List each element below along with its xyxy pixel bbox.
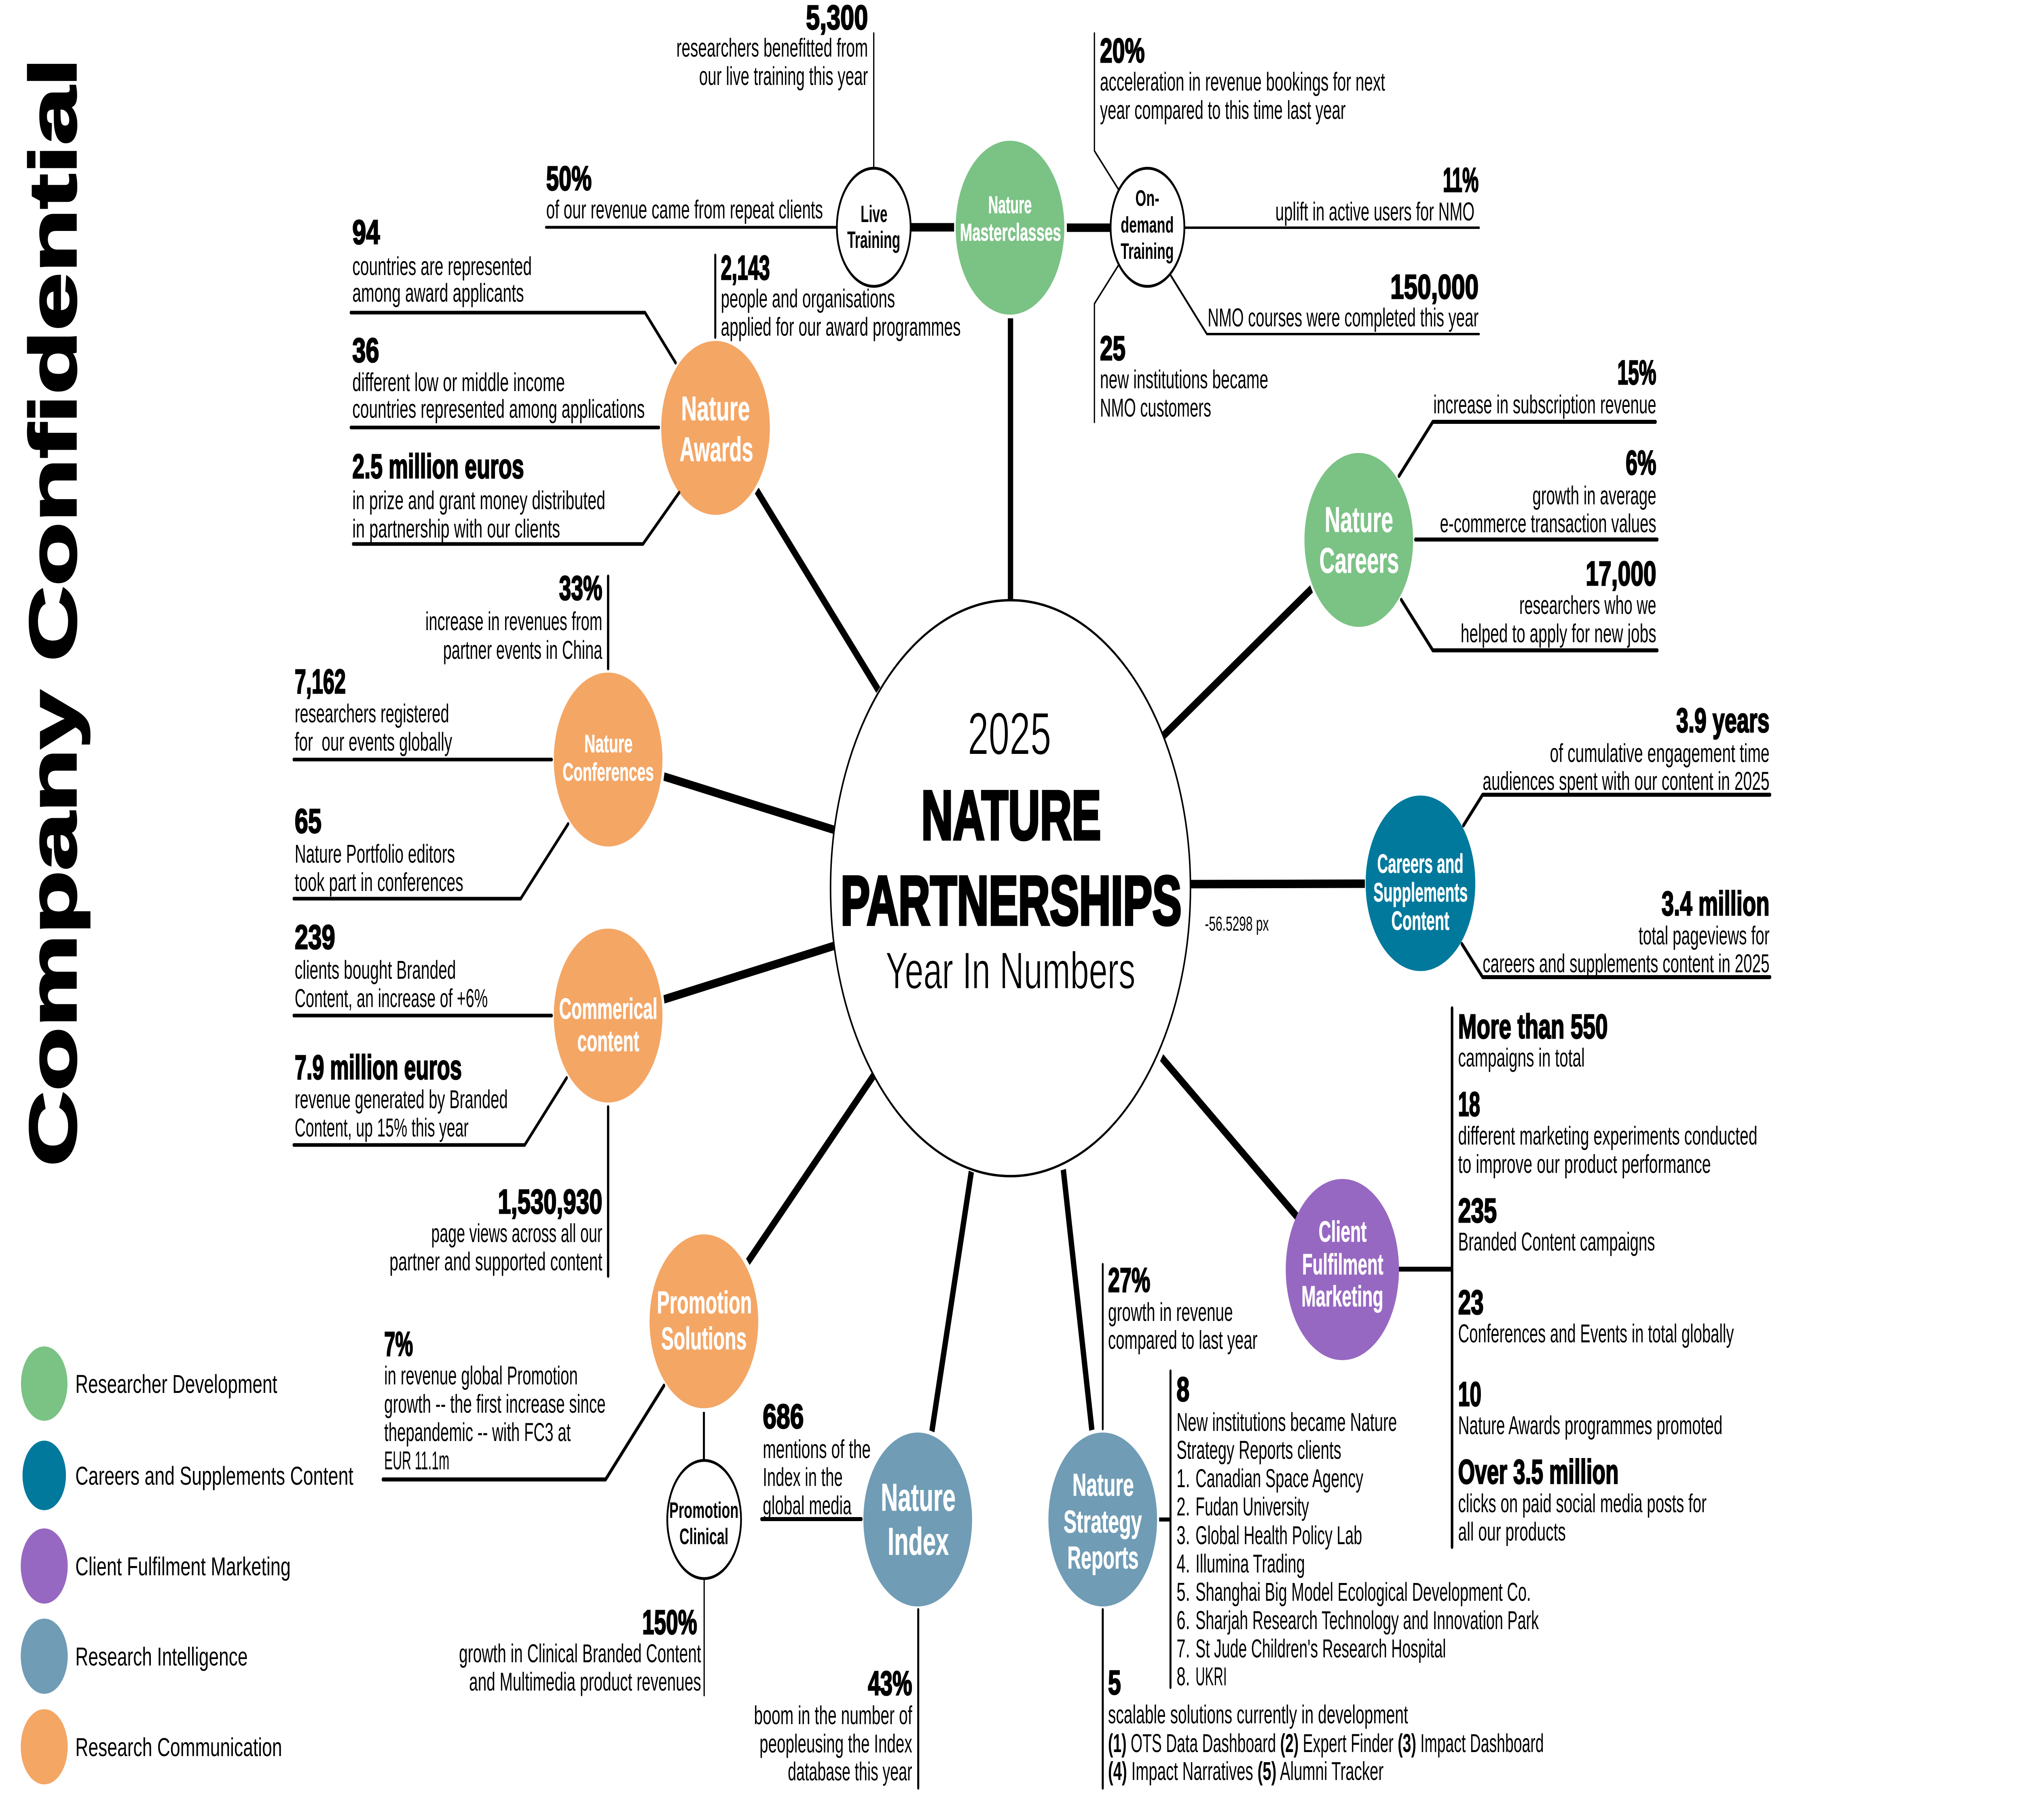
stat: 20%: acceleration in revenue bookings for next — [1100, 68, 1385, 96]
stat: over 3.5 million — [1458, 1453, 1707, 1546]
panel: promotion solutions — [383, 1234, 758, 1696]
stat: 8 new institutions list: 4. — [1176, 1550, 1190, 1578]
live training circle: Training — [847, 227, 900, 253]
stat: 8 new institutions list: 8. — [1176, 1663, 1190, 1691]
on-demand training circle: Training — [1121, 239, 1174, 264]
stat: 17,000 — [1401, 554, 1657, 650]
stat: 3.4 million: 3.4 million — [1662, 885, 1770, 923]
stat: 43%: peopleusing the Index — [759, 1730, 912, 1758]
stat: 6%: e-commerce transaction values — [1440, 510, 1656, 538]
stat: 36 — [351, 331, 659, 427]
stat: 7,162 — [294, 662, 552, 760]
stat: 2.5 million euros: 2.5 million euros — [352, 447, 524, 485]
promotion clinical circle — [667, 1460, 741, 1579]
client fulfilment circle — [1286, 1179, 1399, 1360]
stat: over 3.5 million: clicks on paid social media posts for — [1458, 1490, 1707, 1518]
panel: nature index — [754, 1397, 972, 1788]
stat: 8 new institutions list: Sharjah Research Technology and Innovation Park — [1195, 1606, 1539, 1635]
client fulfilment circle: Marketing — [1301, 1280, 1383, 1313]
stat: 8 new institutions list: 5. — [1176, 1578, 1190, 1606]
on-demand training circle — [1110, 168, 1184, 286]
conferences circle: Conferences — [563, 758, 654, 786]
stat: 7%: growth -- the first increase since — [384, 1390, 606, 1418]
strategy reports circle: Reports — [1067, 1540, 1139, 1575]
stat: 2,143: people and organisations — [721, 285, 895, 313]
stat: 33%: increase in revenues from — [425, 607, 602, 636]
legend item: research intelligence — [21, 1619, 247, 1694]
stat: 20% — [1094, 32, 1385, 189]
stat: 18: 18 — [1458, 1085, 1480, 1123]
stat: 7,162: 7,162 — [295, 662, 346, 700]
index circle: Nature — [881, 1476, 956, 1519]
stat: 15% — [1399, 353, 1656, 476]
strategy reports circle — [1048, 1433, 1157, 1606]
stat: 65: 65 — [295, 802, 321, 840]
stat: 7.9 million euros: revenue generated by Branded — [295, 1086, 508, 1114]
stat: 94: among award applicants — [352, 279, 524, 307]
stat: 15%: increase in subscription revenue — [1433, 391, 1656, 419]
commercial circle — [554, 929, 662, 1103]
careers and supplements circle: Careers and — [1377, 849, 1464, 878]
stat: 23 — [1458, 1283, 1734, 1348]
heading: nature: NATURE — [921, 777, 1101, 854]
stat: 686: Index in the — [763, 1463, 843, 1492]
stat: 50%: 50% — [546, 159, 592, 197]
stat: 235: 235 — [1458, 1191, 1497, 1230]
stat: 239: Content, an increase of +6% — [295, 984, 488, 1013]
connector to promotion clinical — [702, 1412, 706, 1460]
stat: over 3.5 million: Over 3.5 million — [1458, 1453, 1618, 1491]
promotion solutions circle — [649, 1234, 758, 1408]
live training circle — [837, 168, 911, 286]
stat: 235: Branded Content campaigns — [1458, 1228, 1655, 1256]
stat: 8 new institutions list: Global Health Policy Lab — [1195, 1522, 1362, 1550]
legend item: client fulfilment marketing: Client Fulfilment Marketing — [75, 1553, 291, 1581]
stat: 10: 10 — [1458, 1375, 1481, 1413]
title: company confidential: Company Confidential — [16, 58, 90, 1166]
stat: 8 new institutions list: UKRI — [1195, 1663, 1227, 1691]
stat: 11%: 11% — [1443, 161, 1478, 199]
stat: 94: countries are represented — [352, 252, 532, 281]
strategy reports circle: Strategy — [1064, 1504, 1142, 1539]
careers and supplements circle — [1366, 796, 1475, 971]
careers and supplements circle: Supplements — [1373, 877, 1468, 907]
stat: 27% — [1103, 1261, 1257, 1429]
stat: 7%: thepandemic -- with FC3 at — [384, 1418, 571, 1447]
stat: 8 new institutions list: 8 — [1176, 1370, 1189, 1408]
stat: 7.9 million euros: 7.9 million euros — [295, 1048, 462, 1086]
live training circle: Live — [861, 201, 887, 227]
stat: 2.5 million euros: in partnership with our clients — [352, 515, 560, 543]
stat: 686: 686 — [763, 1397, 804, 1435]
legend — [21, 1346, 353, 1784]
stat: 11%: uplift in active users for NMO — [1275, 198, 1474, 226]
stat: 1,530,930: partner and supported content — [389, 1248, 603, 1276]
masterclass circle: Nature — [988, 191, 1032, 218]
careers circle: Nature — [1325, 500, 1393, 540]
stat: 65: took part in conferences — [295, 868, 463, 897]
stray measurement label: -56.5298 px — [1205, 912, 1269, 935]
stat: 27%: 27% — [1108, 1261, 1150, 1299]
stat: 5 scalable solutions — [1103, 1610, 1544, 1788]
promotion solutions circle: Solutions — [661, 1321, 747, 1356]
index circle — [863, 1433, 972, 1606]
stat: 8 new institutions list: 7. — [1176, 1635, 1190, 1663]
legend item: research communication: Research Communication — [75, 1733, 282, 1762]
stat: 7.9 million euros: Content, up 15% this year — [295, 1114, 469, 1142]
stat: 8 new institutions list: 6. — [1176, 1606, 1190, 1635]
stat: 7%: in revenue global Promotion — [384, 1362, 578, 1390]
stat: 50%: of our revenue came from repeat clients — [546, 196, 823, 224]
panel: commercial content — [294, 918, 662, 1276]
stat: 8 new institutions list: 1. — [1176, 1464, 1190, 1493]
stat: 65: Nature Portfolio editors — [295, 840, 455, 868]
legend item: research communication — [21, 1709, 282, 1784]
legend item: client fulfilment marketing — [21, 1528, 291, 1604]
stat: more than 550: campaigns in total — [1458, 1044, 1585, 1072]
on-demand training circle: On- — [1136, 186, 1159, 211]
stat: 23: Conferences and Events in total globally — [1458, 1320, 1734, 1348]
promotion clinical circle: Clinical — [679, 1524, 728, 1549]
stat: 2.5 million euros — [352, 447, 679, 544]
stat: 2.5 million euros: in prize and grant money distributed — [352, 487, 605, 515]
stat: 5 scalable solutions: 5 — [1108, 1663, 1121, 1701]
stat: 23: 23 — [1458, 1283, 1484, 1321]
stat: 6% — [1415, 444, 1657, 540]
stat: 2,143: applied for our award programmes — [721, 313, 961, 341]
careers and supplements circle: Content — [1392, 906, 1449, 935]
panel: careers and supplements content — [1366, 701, 1770, 978]
stat: 33%: partner events in China — [443, 636, 603, 665]
stat: 5 scalable solutions: scalable solutions currently in development — [1108, 1701, 1408, 1729]
stat: 3.9 years — [1464, 701, 1770, 825]
commercial circle: content — [577, 1025, 639, 1058]
stat: 8 new institutions list: 2. — [1176, 1493, 1190, 1521]
panel: nature strategy reports — [1048, 1261, 1544, 1788]
stat: 7% — [383, 1325, 664, 1479]
stat: 18: to improve our product performance — [1458, 1150, 1711, 1179]
stat: 7.9 million euros — [294, 1048, 567, 1145]
stat: 10 — [1458, 1375, 1722, 1440]
stat: 5 scalable solutions: (1) OTS Data Dashboard (2) Expert Finder (3) Impact Dashboard — [1108, 1729, 1544, 1758]
masterclass circle: Masterclasses — [960, 219, 1061, 246]
stat: 239: clients bought Branded — [295, 956, 456, 984]
stat: 17,000: 17,000 — [1586, 554, 1656, 593]
stat: 1,530,930: 1,530,930 — [498, 1183, 602, 1221]
stat: 27%: growth in revenue — [1108, 1298, 1233, 1327]
stat: 1,530,930: page views across all our — [431, 1219, 602, 1248]
stat: 5 scalable solutions: (4) Impact Narratives (5) Alumni Tracker — [1108, 1757, 1383, 1786]
stat: 7%: EUR 11.1m — [384, 1447, 449, 1475]
strategy reports circle: Nature — [1072, 1467, 1134, 1503]
stat: 15%: 15% — [1617, 353, 1656, 392]
careers circle: Careers — [1319, 541, 1399, 580]
stat: 5,300: our live training this year — [699, 62, 868, 91]
stat: 36: different low or middle income — [352, 368, 565, 397]
stat: 3.4 million — [1462, 885, 1770, 978]
stat: 235 — [1458, 1191, 1655, 1256]
promotion clinical circle: Promotion — [669, 1498, 738, 1523]
legend item: careers and supplements content — [23, 1441, 353, 1510]
stat: 18: different marketing experiments conducted — [1458, 1122, 1758, 1150]
stat: 43% — [754, 1610, 918, 1788]
stat: 239 — [294, 918, 552, 1016]
stat: 20%: 20% — [1100, 32, 1145, 70]
central circle title — [831, 600, 1191, 1176]
awards circle — [661, 341, 770, 515]
stat: 150,000: NMO courses were completed this year — [1208, 304, 1478, 332]
stat: 8 new institutions list: 3. — [1176, 1522, 1190, 1550]
stat: 6%: growth in average — [1532, 482, 1656, 510]
stat: 7%: 7% — [384, 1325, 413, 1363]
heading: partnerships: PARTNERSHIPS — [841, 862, 1182, 940]
subtitle: Year In Numbers — [886, 942, 1136, 1000]
stat: 239: 239 — [295, 918, 335, 956]
stat: 25: new institutions became — [1100, 366, 1268, 394]
legend item: research intelligence: Research Intelligence — [75, 1643, 247, 1671]
stat: 150%: 150% — [642, 1603, 697, 1641]
stat: 3.9 years: of cumulative engagement time — [1550, 739, 1770, 768]
legend item: researcher development — [21, 1346, 277, 1421]
stat: 25: NMO customers — [1100, 394, 1211, 422]
stat: 25: 25 — [1100, 329, 1125, 367]
stat: 150,000 — [1170, 268, 1479, 334]
stat: 686 — [761, 1397, 871, 1520]
stat: 94: 94 — [352, 213, 380, 251]
stat: 8 new institutions list: Fudan University — [1195, 1493, 1309, 1521]
stat: 94 — [351, 213, 676, 363]
stat: 17,000: researchers who we — [1519, 591, 1656, 620]
panel: nature awards — [351, 213, 961, 544]
stat: 8 new institutions list — [1159, 1370, 1539, 1691]
stat: 33% — [425, 569, 608, 669]
stat: 36: countries represented among applications — [352, 395, 645, 423]
masterclass circle — [956, 141, 1064, 315]
stat: 65 — [294, 802, 568, 899]
stat: 8 new institutions list: New institutions became Nature — [1176, 1408, 1397, 1437]
stat: 2,143: 2,143 — [721, 249, 770, 287]
stat: 33%: 33% — [559, 569, 602, 607]
stat: over 3.5 million: all our products — [1458, 1518, 1566, 1546]
stat: 11% — [1184, 161, 1479, 228]
stat: 27%: compared to last year — [1108, 1326, 1257, 1354]
stat: 686: mentions of the — [763, 1435, 871, 1464]
panel: client fulfilment marketing — [1286, 1007, 1758, 1547]
stat: more than 550 — [1458, 1007, 1608, 1072]
panel: nature careers — [1305, 353, 1657, 650]
stat: 1,530,930 — [389, 1107, 608, 1276]
client fulfilment circle: Client — [1319, 1215, 1366, 1248]
stat: 17,000: helped to apply for new jobs — [1461, 620, 1656, 648]
awards circle: Awards — [680, 430, 753, 468]
conferences circle — [554, 673, 662, 847]
stat: 25 — [1094, 265, 1268, 422]
stat: 10: Nature Awards programmes promoted — [1458, 1412, 1722, 1440]
panel: nature masterclasses — [546, 0, 1479, 422]
stat: 43%: database this year — [788, 1758, 912, 1786]
stat: 2,143 — [715, 249, 961, 341]
stat: 7,162: researchers registered — [295, 700, 449, 728]
stat: 150,000: 150,000 — [1390, 268, 1478, 306]
stat: 43%: 43% — [868, 1664, 912, 1702]
conferences circle: Nature — [584, 730, 632, 758]
careers circle — [1305, 453, 1413, 627]
stat: 3.4 million: careers and supplements content in 2025 — [1483, 950, 1770, 978]
legend item: researcher development: Researcher Development — [75, 1370, 277, 1399]
stat: 8 new institutions list: Shanghai Big Model Ecological Development Co. — [1195, 1578, 1531, 1606]
year: 2025 — [968, 700, 1051, 767]
index circle: Index — [888, 1520, 949, 1563]
stat: 50% — [546, 159, 837, 227]
stat: 8 new institutions list: Strategy Reports clients — [1176, 1436, 1341, 1464]
stat: 8 new institutions list: Canadian Space Agency — [1195, 1464, 1363, 1493]
stat: 686: global media — [763, 1492, 852, 1520]
stat: 150%: and Multimedia product revenues — [469, 1668, 701, 1696]
panel: nature conferences — [294, 569, 662, 899]
on-demand training circle: demand — [1121, 212, 1174, 237]
stat: 20%: year compared to this time last year — [1100, 96, 1345, 125]
stat: 18 — [1458, 1085, 1758, 1179]
stat: 7,162: for our events globally — [295, 728, 452, 756]
stat: 6%: 6% — [1626, 444, 1656, 482]
stat: 5,300: researchers benefitted from — [676, 34, 868, 62]
client fulfilment circle: Fulfilment — [1302, 1248, 1383, 1281]
awards circle: Nature — [681, 389, 750, 427]
stat: 150%: growth in Clinical Branded Content — [459, 1640, 701, 1668]
stat: more than 550: More than 550 — [1458, 1007, 1608, 1045]
stat: 8 new institutions list: Illumina Trading — [1195, 1550, 1305, 1578]
stat: 5,300 — [676, 0, 874, 168]
stat: 36: 36 — [352, 331, 379, 369]
connector and vertical rule — [1399, 1008, 1452, 1547]
legend item: careers and supplements content: Careers and Supplements Content — [75, 1462, 353, 1490]
commercial circle: Commerical — [559, 993, 658, 1025]
stat: 3.9 years: audiences spent with our content in 2025 — [1483, 767, 1770, 796]
stat: 43%: boom in the number of — [754, 1701, 912, 1730]
connector: masterclass links — [910, 227, 1110, 228]
stat: 8 new institutions list: St Jude Children's Research Hospital — [1195, 1635, 1446, 1663]
stat: 3.9 years: 3.9 years — [1676, 701, 1770, 739]
spokes from centre to topic circles — [664, 318, 1365, 1431]
stat: 150% — [459, 1579, 704, 1696]
stat: 3.4 million: total pageviews for — [1639, 922, 1770, 950]
promotion solutions circle: Promotion — [657, 1285, 752, 1320]
